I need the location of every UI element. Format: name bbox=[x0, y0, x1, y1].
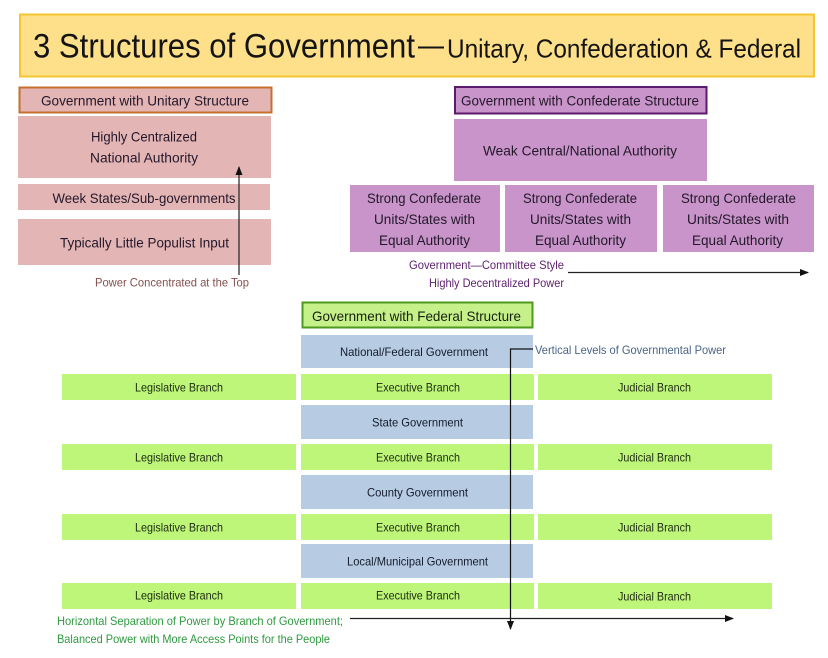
populist input block: Typically Little Populist Input bbox=[60, 234, 229, 250]
weak states block bbox=[18, 184, 270, 210]
caption: horizontal separation: Horizontal Separation of Power by Branch of Government; bbox=[57, 614, 343, 628]
panel: federal structure bbox=[57, 302, 772, 646]
caption: power concentrated: Power Concentrated at the Top bbox=[95, 276, 249, 290]
confederate unit 1: Units/States with bbox=[374, 211, 475, 227]
federal heading: Government with Federal Structure bbox=[312, 308, 521, 324]
confederate unit 3: Units/States with bbox=[687, 211, 789, 227]
unitary heading: Government with Unitary Structure bbox=[41, 92, 249, 108]
confederate heading: Government with Confederate Structure bbox=[461, 92, 699, 108]
confederate unit 3: Strong Confederate bbox=[681, 190, 796, 206]
arrow: vertical levels bbox=[510, 349, 533, 629]
confederate heading bbox=[455, 87, 706, 114]
local branches row: Executive Branch bbox=[376, 588, 460, 602]
local branches row bbox=[62, 583, 772, 609]
local government level bbox=[301, 544, 533, 578]
local branches row: Judicial Branch bbox=[618, 590, 691, 604]
state branches row bbox=[62, 444, 772, 470]
confederate unit 2: Units/States with bbox=[530, 211, 631, 227]
weak central authority block bbox=[454, 119, 707, 181]
caption: committee style bbox=[409, 258, 564, 290]
confederate unit 2: Equal Authority bbox=[535, 232, 626, 248]
confederate unit 1: Equal Authority bbox=[379, 232, 470, 248]
confederate unit 1 bbox=[350, 185, 500, 252]
national authority block: Highly Centralized bbox=[91, 128, 197, 144]
title banner bbox=[20, 14, 814, 76]
confederate unit 3: Equal Authority bbox=[692, 232, 783, 248]
local government level: Local/Municipal Government bbox=[347, 554, 489, 568]
arrow: horizontal separation bbox=[350, 618, 733, 620]
weak states block: Week States/Sub-governments bbox=[52, 190, 236, 206]
arrow: power upward bbox=[238, 167, 240, 275]
title: dash bbox=[418, 46, 444, 48]
state branches row: Judicial Branch bbox=[618, 450, 691, 464]
panel: confederate structure bbox=[350, 87, 814, 290]
national government level bbox=[301, 335, 533, 368]
title: subtitle: Unitary, Confederation & Federal bbox=[447, 34, 801, 64]
caption: committee style: Highly Decentralized Power bbox=[429, 276, 564, 290]
national government level: National/Federal Government bbox=[340, 345, 489, 359]
confederate unit 2 bbox=[505, 185, 657, 252]
state branches row: Legislative Branch bbox=[135, 450, 223, 464]
state branches row: Executive Branch bbox=[376, 450, 460, 464]
federal heading bbox=[302, 302, 532, 328]
caption: horizontal separation bbox=[57, 614, 343, 646]
national authority block bbox=[18, 116, 271, 178]
national authority block: National Authority bbox=[90, 150, 198, 166]
national branches row: Executive Branch bbox=[376, 380, 460, 394]
county government level bbox=[301, 475, 533, 509]
confederate unit 2: Strong Confederate bbox=[523, 190, 637, 206]
panel: unitary structure bbox=[18, 88, 272, 290]
caption: horizontal separation: Balanced Power with More Access Points for the People bbox=[57, 632, 330, 646]
unitary heading bbox=[20, 88, 272, 112]
populist input block bbox=[18, 219, 271, 265]
caption: committee style: Government—Committee Style bbox=[409, 258, 564, 272]
confederate unit 1: Strong Confederate bbox=[367, 190, 481, 206]
national branches row bbox=[62, 374, 772, 400]
title: main: 3 Structures of Government bbox=[33, 28, 415, 66]
local branches row: Legislative Branch bbox=[135, 588, 223, 602]
caption: vertical levels: Vertical Levels of Governmental Power bbox=[535, 343, 726, 357]
confederate unit 3 bbox=[663, 185, 814, 252]
state government level: State Government bbox=[372, 416, 464, 430]
state government level bbox=[301, 405, 533, 439]
county branches row: Legislative Branch bbox=[135, 520, 223, 534]
county branches row: Executive Branch bbox=[376, 520, 460, 534]
county government level: County Government bbox=[367, 486, 469, 500]
weak central authority block: Weak Central/National Authority bbox=[483, 142, 677, 158]
national branches row: Judicial Branch bbox=[618, 380, 691, 394]
arrow: decentralized power bbox=[568, 272, 808, 274]
county branches row bbox=[62, 514, 772, 540]
county branches row: Judicial Branch bbox=[618, 520, 691, 534]
national branches row: Legislative Branch bbox=[135, 380, 223, 394]
